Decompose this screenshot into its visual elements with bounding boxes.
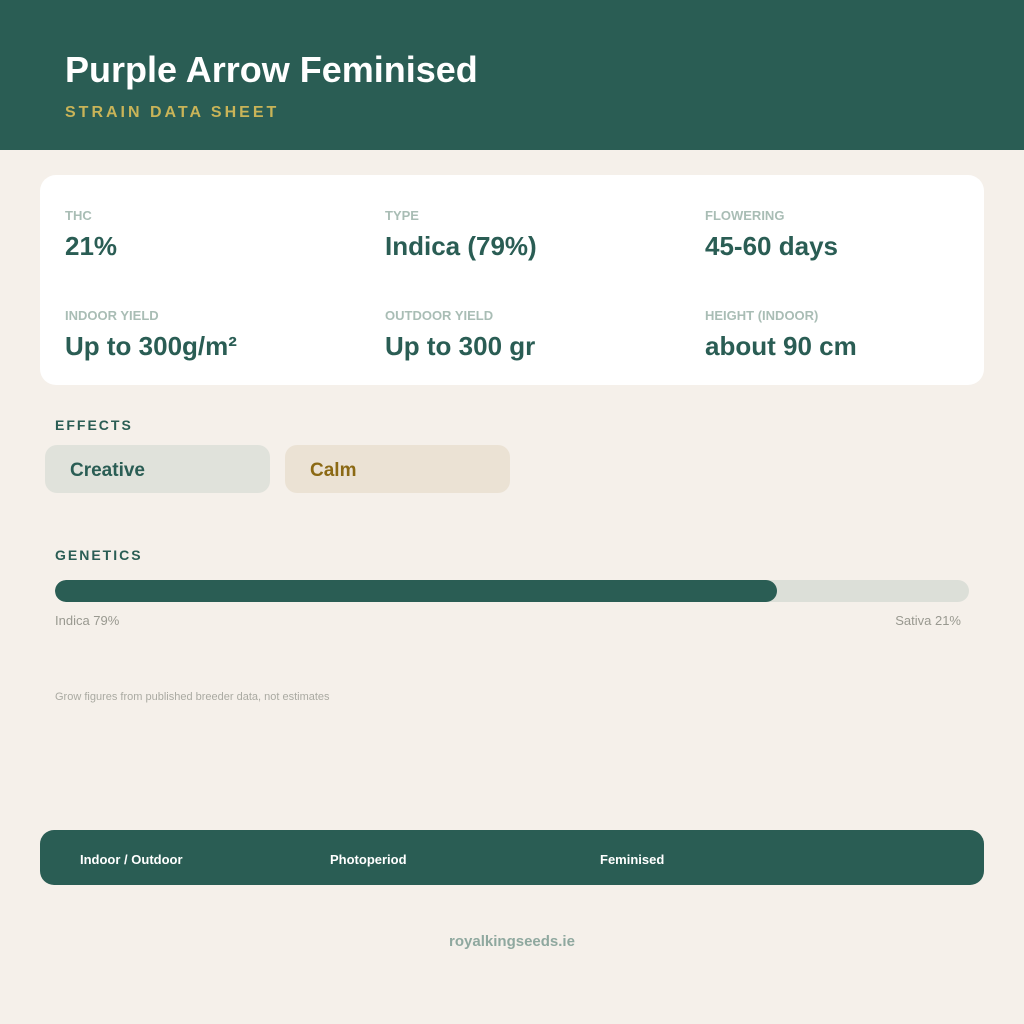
stat: flowering [705,208,838,261]
setting: photoperiod: Photoperiod [330,852,407,867]
stat: outdoor yield: OUTDOOR YIELD [385,308,493,323]
stat: indoor height: about 90 cm [705,331,857,361]
genetics bar [55,580,969,602]
stat: type: Indica (79%) [385,231,537,261]
stat: THC: THC [65,208,92,223]
setting: environment: Indoor / Outdoor [80,852,183,867]
effect tag: calm [285,445,510,493]
label: indica share: Indica 79% [55,613,119,628]
effect tag: calm: Calm [310,460,356,481]
panel: key stats [40,175,984,385]
source note: Grow figures from published breeder data, not estimates [55,691,330,703]
stat: flowering: 45-60 days [705,231,838,261]
website: royalkingseeds.ie [449,933,575,950]
stat: outdoor yield: Up to 300 gr [385,331,535,361]
stat: type [385,208,537,261]
footer info bar [40,830,984,885]
effect tag: creative: Creative [70,460,145,481]
stat: outdoor yield [385,308,535,361]
heading: effects: EFFECTS [55,417,133,433]
header banner [0,0,1024,150]
stat: THC [65,208,117,261]
effect tag: creative [45,445,270,493]
subtitle: STRAIN DATA SHEET [65,104,279,121]
setting: feminised: Feminised [600,852,664,867]
stat: indoor yield [65,308,237,361]
stat: type: TYPE [385,208,419,223]
stat: indoor yield: Up to 300g/m² [65,331,237,361]
stat: indoor yield: INDOOR YIELD [65,308,159,323]
stat: THC: 21% [65,231,117,261]
heading: genetics: GENETICS [55,547,143,563]
stat: flowering: FLOWERING [705,208,784,223]
stat: indoor height [705,308,857,361]
stat: indoor height: HEIGHT (INDOOR) [705,308,818,323]
title: Purple Arrow Feminised [65,49,478,90]
label: sativa share: Sativa 21% [895,613,961,628]
